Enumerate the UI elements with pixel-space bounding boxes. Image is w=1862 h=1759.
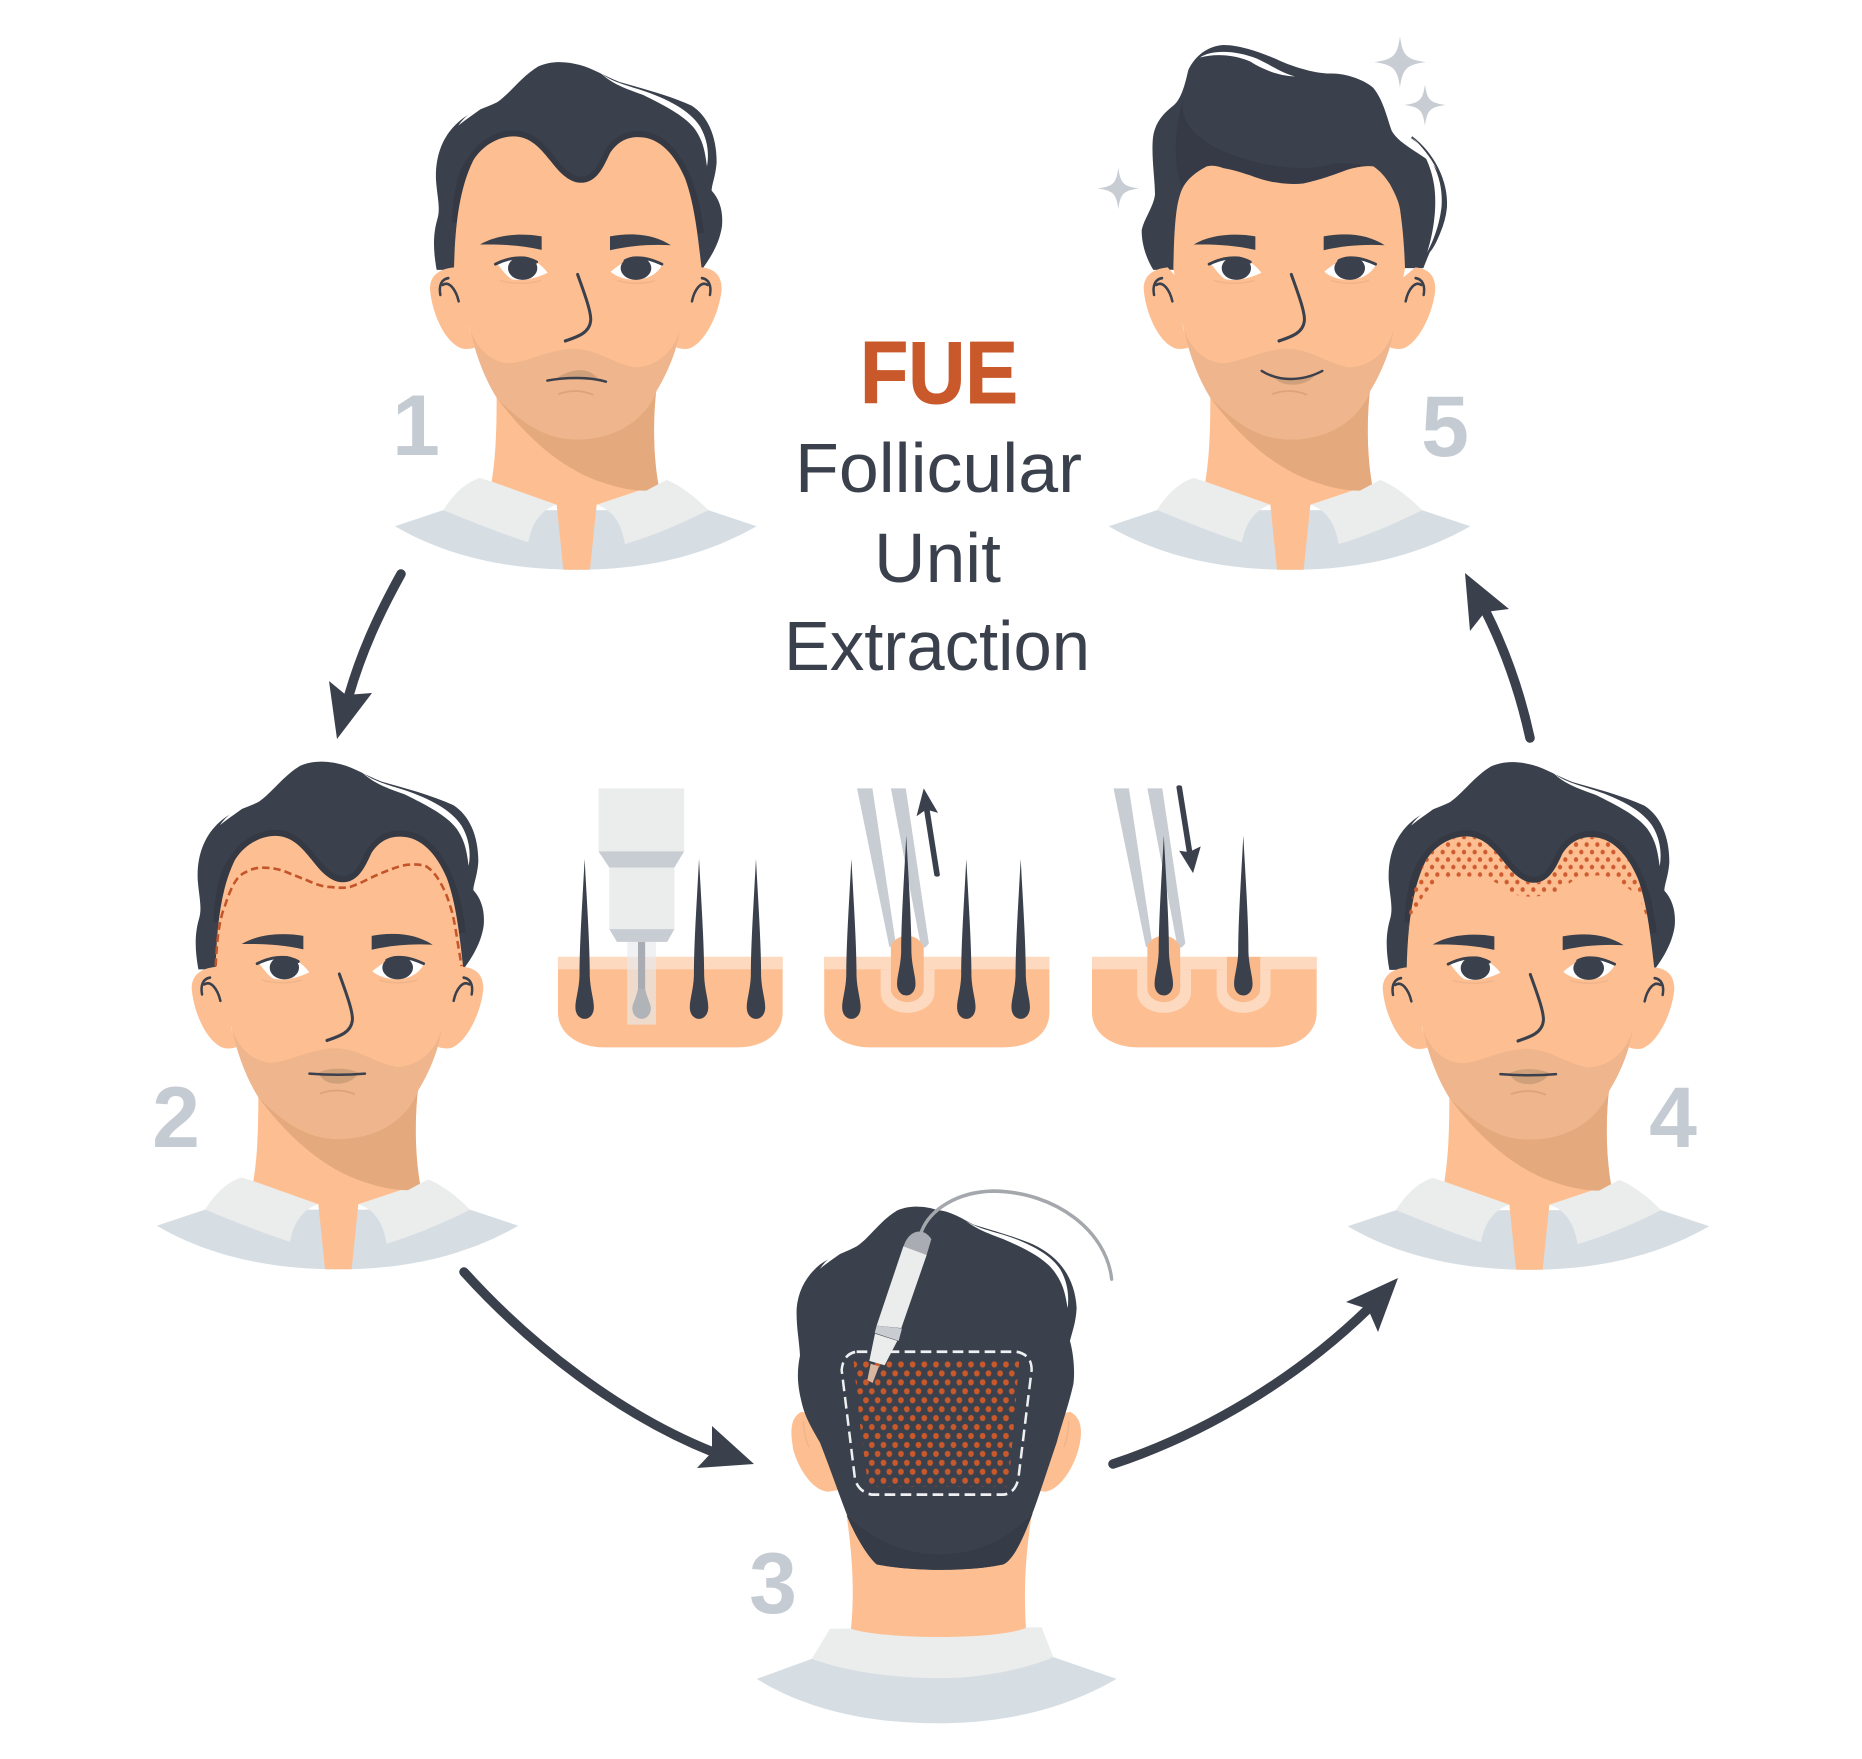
sockets xyxy=(1137,969,1191,1013)
ears xyxy=(1383,967,1674,1049)
arrow from step 2 to step 3 xyxy=(464,1272,754,1468)
facial features xyxy=(440,234,710,439)
face skin xyxy=(1173,166,1405,439)
ears xyxy=(430,267,722,349)
head 4: implanted hairline xyxy=(1348,762,1709,1270)
title xyxy=(784,323,1090,685)
mouth xyxy=(547,370,606,382)
hair lower shadow xyxy=(847,1514,1033,1570)
number 3: 3 xyxy=(749,1536,797,1632)
receding hair xyxy=(1387,762,1675,970)
tweezers xyxy=(857,788,929,948)
tweezers xyxy=(1114,788,1185,948)
grafts xyxy=(1147,936,1260,1002)
hair shine xyxy=(820,1213,1068,1308)
receding hair xyxy=(434,62,722,270)
number 5: 5 xyxy=(1421,379,1469,475)
sparkles xyxy=(1098,36,1446,209)
facial features xyxy=(1154,234,1424,439)
ears xyxy=(791,1412,1081,1492)
ears xyxy=(1144,267,1435,349)
hair follicles xyxy=(575,859,765,1019)
punch tool xyxy=(598,788,684,1025)
arrow down xyxy=(1179,787,1189,851)
full hair xyxy=(1142,45,1447,270)
subtitle line 1: Follicular xyxy=(795,429,1082,507)
shirt and neck xyxy=(157,1086,518,1269)
dashed hairline marking xyxy=(216,864,462,966)
follicle diagrams xyxy=(558,787,1317,1047)
face skin xyxy=(1407,836,1654,1139)
extracted graft xyxy=(891,936,924,1002)
subtitle line 3: Extraction xyxy=(784,607,1090,685)
subtitle line 2: Unit xyxy=(874,519,1001,597)
heading FUE: FUE xyxy=(860,323,1018,422)
number 1: 1 xyxy=(392,378,440,474)
collar xyxy=(812,1627,1053,1678)
hair follicles xyxy=(842,835,1030,1019)
head 1: before treatment xyxy=(395,62,757,570)
panel: follicle extraction xyxy=(824,788,1049,1047)
shirt xyxy=(757,1657,1117,1723)
mouth xyxy=(1500,1069,1556,1084)
facial features xyxy=(202,934,472,1139)
neck xyxy=(847,1515,1032,1637)
head 2: hairline marked xyxy=(157,762,518,1269)
face skin xyxy=(216,836,463,1139)
implanted follicle dots xyxy=(1407,836,1648,930)
shirt and neck xyxy=(1109,387,1470,570)
face skin xyxy=(454,136,702,439)
hair shine side xyxy=(1412,137,1442,252)
socket xyxy=(881,969,934,1013)
hair shine top xyxy=(1200,52,1295,76)
hair follicles xyxy=(1155,835,1253,995)
number 2: 2 xyxy=(152,1070,200,1166)
shirt and neck xyxy=(395,387,757,570)
dashed donor area xyxy=(842,1352,1032,1495)
panel: graft implantation xyxy=(1092,787,1317,1047)
arrow from step 1 to step 2 xyxy=(329,574,401,739)
hair shine xyxy=(220,768,470,866)
head 3: back of the head, donor area xyxy=(757,1191,1117,1723)
receding hair xyxy=(196,762,484,969)
arrow up xyxy=(927,810,937,875)
arrow from step 3 to step 4 xyxy=(1113,1278,1398,1464)
head 5: final result with full hair xyxy=(1098,36,1470,570)
donor dots xyxy=(853,1359,1019,1487)
hair outer rim xyxy=(1412,137,1446,253)
arrow from step 4 to step 5 xyxy=(1465,573,1530,738)
extraction handpiece with cable xyxy=(867,1191,1112,1383)
ears xyxy=(192,967,483,1048)
hair xyxy=(797,1207,1077,1570)
facial features xyxy=(1393,934,1663,1139)
shirt and neck xyxy=(1348,1087,1709,1270)
hair shine xyxy=(458,69,708,166)
smile xyxy=(1262,371,1322,385)
panel: punch extraction xyxy=(558,788,783,1047)
hair swoosh shadow xyxy=(1176,99,1390,191)
mouth xyxy=(309,1069,365,1084)
number 4: 4 xyxy=(1649,1070,1697,1166)
hair shine xyxy=(1411,769,1661,866)
